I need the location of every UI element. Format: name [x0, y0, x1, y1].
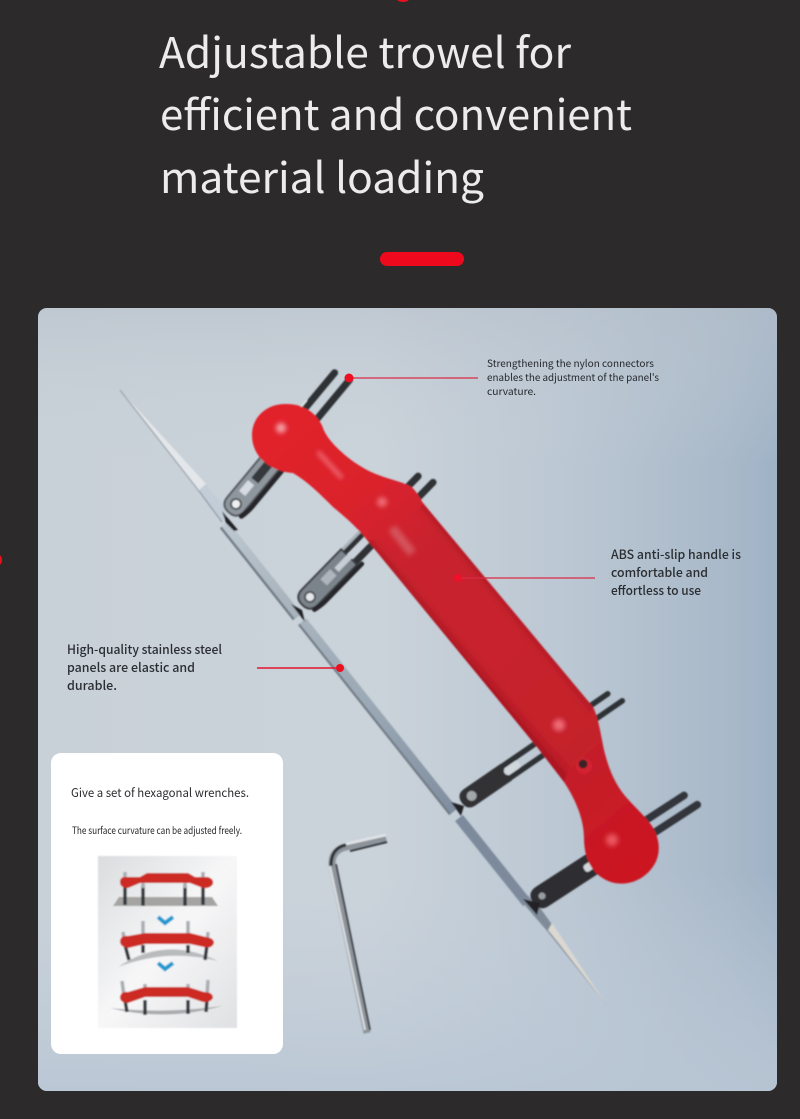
- connector line: [257, 667, 340, 669]
- handle highlights: [276, 423, 618, 846]
- connector: top: [220, 367, 354, 521]
- callout text: [67, 639, 222, 694]
- left red mark: [0, 555, 2, 565]
- callout text: Strengthening the nylon connectors: [487, 355, 654, 370]
- card subheading: The surface curvature can be adjusted freely.: [72, 822, 242, 837]
- state: flat: [113, 872, 218, 906]
- callout: nylon connectors: [344, 355, 659, 398]
- chevron down: [158, 963, 173, 969]
- panel: product photo: [38, 308, 777, 1091]
- title: [159, 20, 632, 206]
- title: Adjustable trowel for: [159, 20, 572, 81]
- connector: third: [456, 687, 624, 811]
- callout text: High-quality stainless steel: [67, 639, 222, 658]
- title: material loading: [160, 145, 484, 206]
- card heading: Give a set of hexagonal wrenches.: [71, 784, 249, 801]
- blade joint top: [222, 511, 238, 531]
- handle edge shading: [367, 503, 593, 782]
- callout text: curvature.: [487, 383, 536, 398]
- panel: hexagonal wrench card: [51, 753, 283, 1054]
- state: concave: [110, 980, 222, 1015]
- screw hole: [576, 758, 592, 774]
- callout text: [611, 544, 741, 599]
- steel blade: [120, 390, 608, 1007]
- red accent bar: [380, 252, 464, 266]
- chevron down: [158, 917, 173, 923]
- callout: steel panels: [67, 639, 344, 694]
- blade joint fourth: [523, 899, 540, 915]
- connector line: [458, 577, 595, 579]
- callout text: panels are elastic and: [67, 657, 195, 676]
- title: efficient and convenient: [160, 82, 632, 143]
- curvature diagram: [98, 856, 237, 1028]
- panel background: [38, 308, 777, 1091]
- red handle: [252, 404, 659, 884]
- diagram backdrop: [98, 856, 237, 1028]
- callout text: ABS anti-slip handle is: [611, 544, 741, 563]
- callout text: comfortable and: [611, 562, 708, 581]
- blade joint second: [291, 604, 305, 622]
- callout text: [487, 355, 659, 398]
- connector: second: [294, 469, 437, 615]
- callout: handle: [454, 544, 741, 599]
- connector line: [350, 377, 478, 379]
- blade joint third: [451, 802, 464, 816]
- callout text: durable.: [67, 675, 117, 694]
- state: convex: [118, 921, 218, 967]
- trowel: [120, 367, 699, 1007]
- card background: [51, 753, 283, 1054]
- connector: fourth: [527, 789, 699, 912]
- callout text: effortless to use: [611, 580, 701, 599]
- top red mark: [397, 0, 409, 2]
- callout text: enables the adjustment of the panel's: [487, 369, 659, 384]
- hex wrench: [330, 835, 387, 1033]
